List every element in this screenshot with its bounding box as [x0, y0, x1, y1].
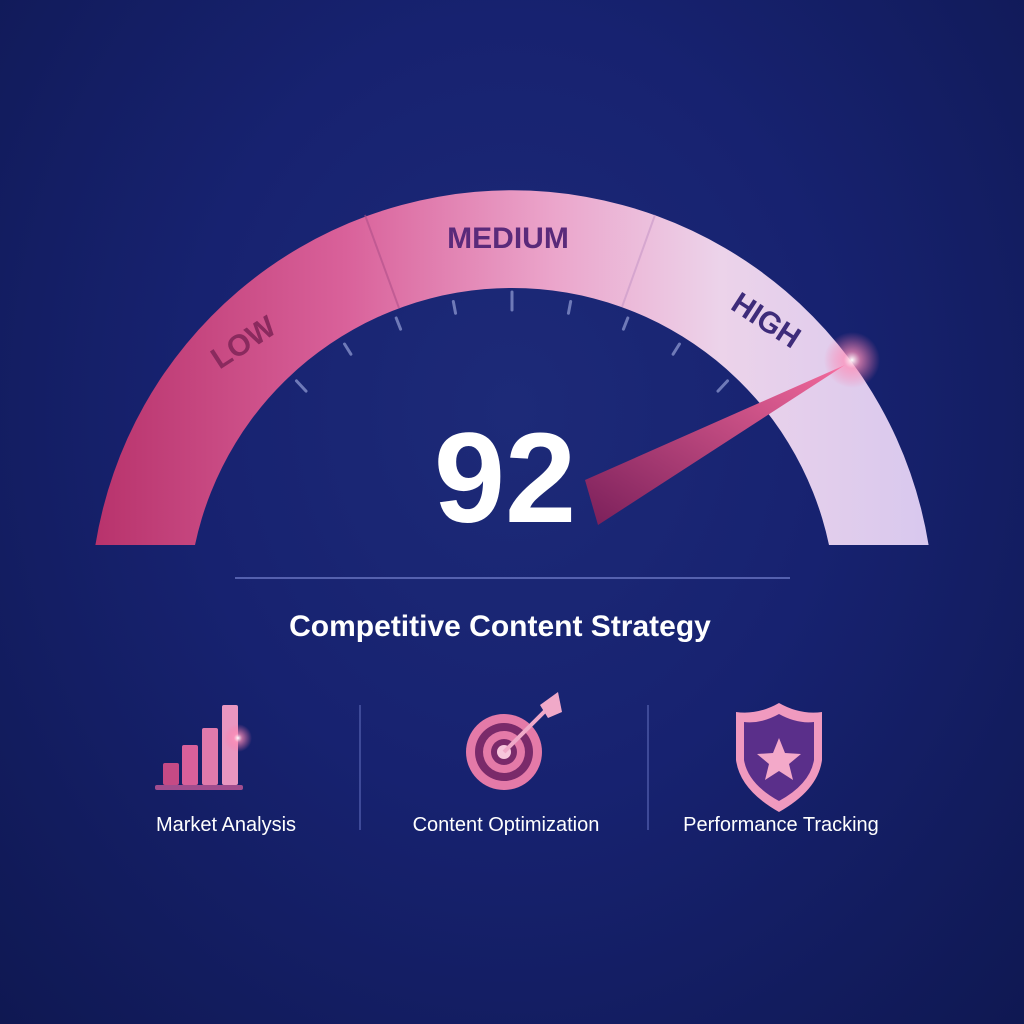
gauge arc — [95, 190, 929, 545]
label: MEDIUM: MEDIUM — [447, 222, 569, 255]
subtitle: Competitive Content Strategy — [289, 610, 711, 643]
label: HIGH: HIGH — [725, 286, 806, 355]
icon: target — [466, 692, 562, 790]
ticks — [296, 292, 728, 391]
icon: bar chart — [155, 705, 252, 790]
label: Market Analysis: Market Analysis — [156, 814, 296, 836]
needle — [585, 332, 880, 525]
label: Performance Tracking: Performance Tracking — [683, 814, 879, 836]
icon: shield — [736, 703, 822, 812]
label: LOW: LOW — [205, 310, 283, 376]
score 92: 92 — [434, 407, 576, 550]
label: Content Optimization: Content Optimization — [413, 814, 599, 836]
